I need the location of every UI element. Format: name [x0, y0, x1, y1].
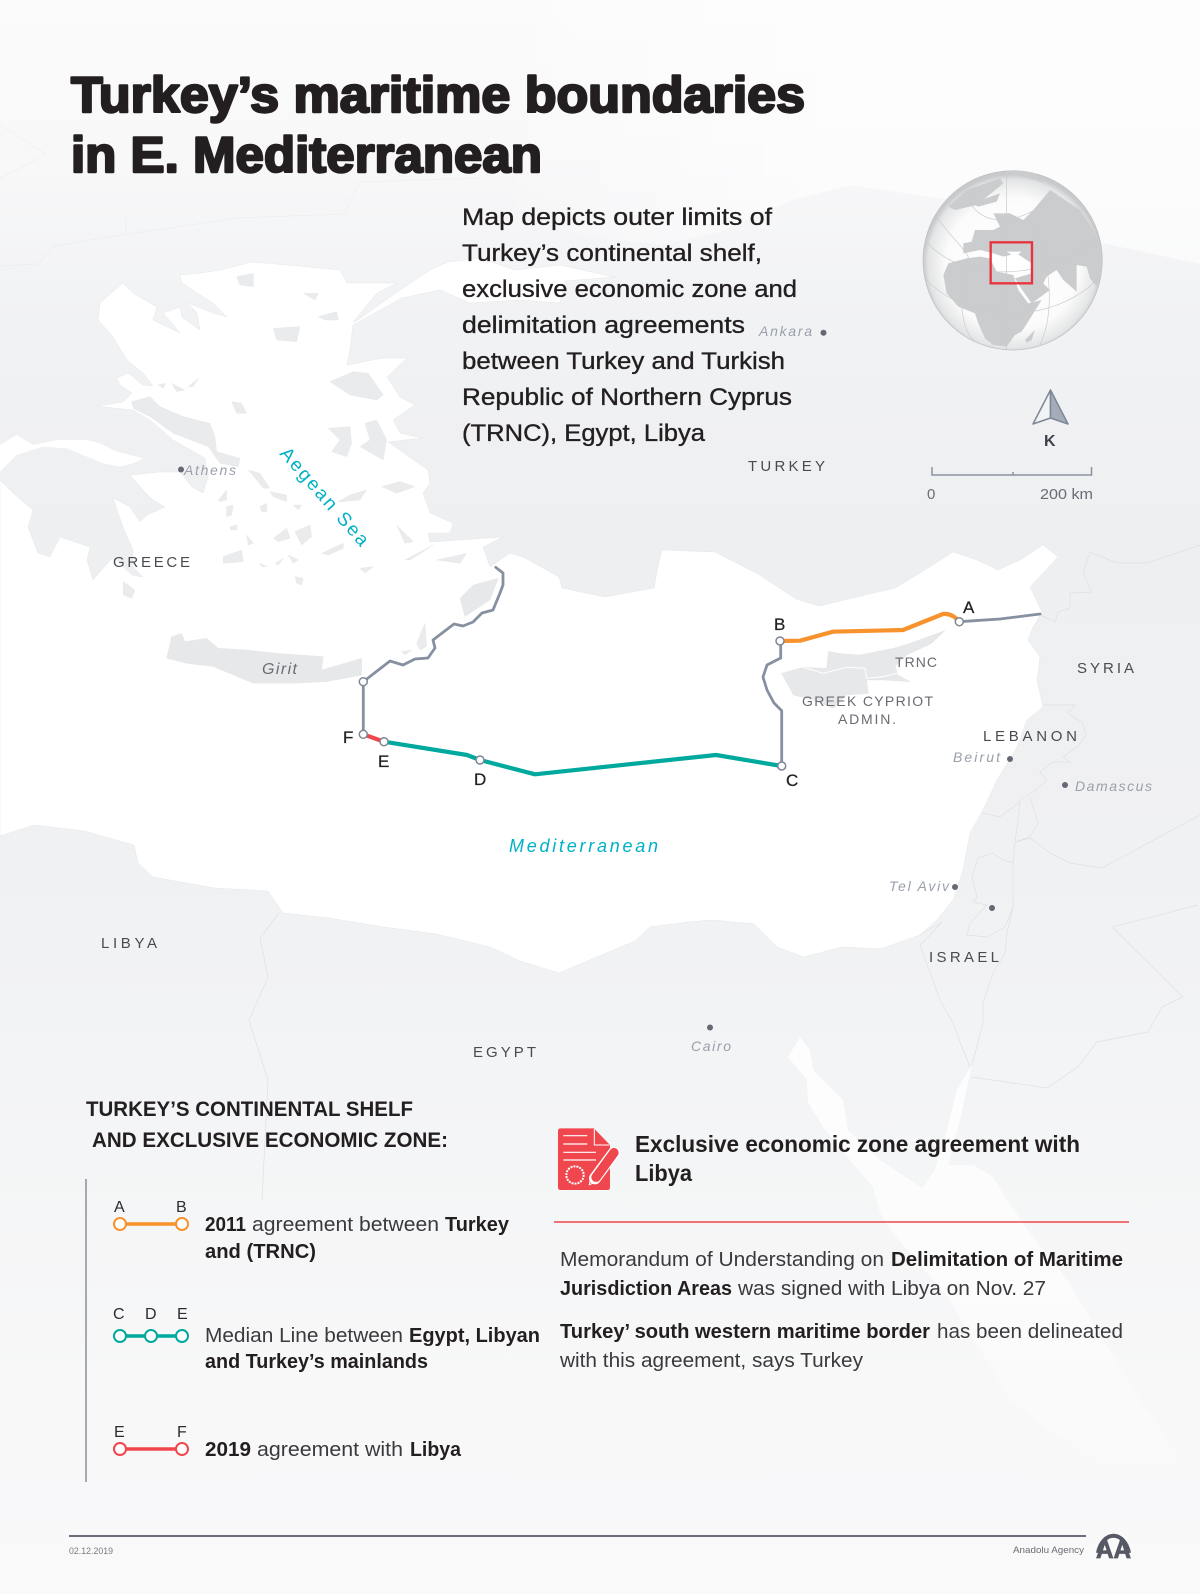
panel body text: has been delineated	[937, 1321, 1123, 1343]
route: Aegean grey limit	[363, 567, 503, 734]
panel body text: was signed with Libya on Nov. 27	[737, 1278, 1046, 1300]
legend item: C-D-E median line: C	[113, 1306, 125, 1323]
panel heading: Libya	[635, 1160, 692, 1186]
legend item: E-F 2019: E	[114, 1424, 125, 1441]
country label: Egypt: EGYPT	[473, 1044, 536, 1061]
legend item: E-F 2019: 2019	[205, 1439, 251, 1461]
icon: signed document	[558, 1128, 614, 1190]
sea label: Aegean Sea: Aegean Sea	[275, 443, 373, 551]
route: C to B grey limit	[763, 641, 782, 766]
legend item: E-F 2019: agreement with	[257, 1439, 403, 1461]
country label: Syria: SYRIA	[1077, 660, 1134, 677]
island label: Girit: Girit	[262, 661, 298, 678]
logo: Anadolu Agency: AA	[1096, 1536, 1131, 1564]
country label: Greece: GREECE	[113, 554, 190, 571]
route point letters: A	[963, 598, 975, 617]
label: TRNC: TRNC	[895, 654, 937, 670]
route point letters: E	[378, 752, 389, 771]
panel: Libya agreement	[554, 1131, 1129, 1372]
legend item: E-F 2019	[114, 1424, 462, 1461]
panel heading: Exclusive economic zone agreement with	[635, 1131, 1080, 1157]
legend panel	[86, 1179, 540, 1482]
panel body text: Delimitation of Maritime	[891, 1249, 1123, 1271]
legend heading: AND EXCLUSIVE ECONOMIC ZONE:	[92, 1129, 448, 1152]
description text block: exclusive economic zone and	[462, 276, 797, 303]
city: Beirut: Beirut	[953, 749, 1001, 765]
route: A-B orange	[780, 614, 959, 641]
description text block: Map depicts outer limits of	[462, 204, 772, 231]
north arrow: K	[1044, 433, 1056, 450]
route: A to Syria grey limit	[959, 614, 1040, 622]
map: black sea	[470, 0, 1200, 264]
route point letters: D	[474, 770, 486, 789]
panel body text: Turkey’ south western maritime border	[560, 1321, 930, 1343]
map: mediterranean and aegean sea	[0, 258, 1058, 973]
country label: Libya: LIBYA	[101, 935, 157, 952]
description text block: delimitation agreements	[462, 312, 745, 339]
legend item: C-D-E median line: D	[145, 1306, 157, 1323]
route point letters: B	[774, 615, 785, 634]
route: C-D-E teal	[384, 742, 782, 774]
legend item: A-B 2011	[114, 1199, 510, 1263]
label: Greek Cypriot Admin: GREEK CYPRIOT	[802, 693, 933, 709]
scale bar	[927, 467, 1093, 503]
map: land borders	[0, 125, 1200, 1200]
legend item: A-B 2011: A	[114, 1199, 125, 1216]
panel heading	[635, 1131, 1080, 1186]
city: Damascus: Damascus	[1075, 778, 1152, 794]
description text block	[462, 204, 797, 447]
scale bar: 0	[927, 486, 935, 503]
footer: 02.12.2019	[69, 1546, 113, 1556]
footer	[69, 1536, 1131, 1564]
legend item: A-B 2011: Turkey	[445, 1214, 510, 1236]
description text block: Republic of Northern Cyprus	[462, 384, 792, 411]
description text block: between Turkey and Turkish	[462, 348, 785, 375]
route point letters: C	[786, 771, 798, 790]
panel body text: Memorandum of Understanding on	[560, 1249, 884, 1271]
city: Cairo	[691, 1024, 731, 1054]
city: Jerusalem marker	[989, 905, 995, 911]
panel body text: with this agreement, says Turkey	[559, 1350, 863, 1372]
sea label: Mediterranean: Mediterranean	[509, 836, 658, 856]
title	[71, 67, 805, 183]
title: in E. Mediterranean	[71, 127, 542, 183]
route: E-F red	[363, 734, 384, 742]
country label: Lebanon: LEBANON	[983, 728, 1077, 745]
legend item: A-B 2011: B	[176, 1199, 187, 1216]
locator globe	[923, 171, 1102, 350]
legend heading: TURKEY’S CONTINENTAL SHELF	[86, 1098, 413, 1121]
north arrow	[1033, 390, 1068, 450]
route node markers	[359, 618, 963, 770]
panel body text: Jurisdiction Areas	[560, 1278, 732, 1300]
legend item: A-B 2011: agreement between	[252, 1214, 439, 1236]
label: Greek Cypriot Admin: ADMIN.	[838, 711, 896, 727]
legend item: C-D-E median line: Egypt, Libyan	[409, 1325, 540, 1347]
legend item: C-D-E median line: and Turkey’s mainlands	[205, 1351, 428, 1373]
legend item: A-B 2011: 2011	[205, 1214, 246, 1236]
city: Athens: Athens	[183, 462, 236, 478]
legend heading	[86, 1098, 448, 1152]
legend item: E-F 2019: Libya	[410, 1439, 462, 1461]
map: aegean islands and crete	[123, 273, 498, 683]
map: gulf of corinth	[0, 435, 143, 472]
country label: Israel: ISRAEL	[929, 949, 999, 966]
city: Ankara: Ankara	[758, 323, 812, 339]
route point letters	[343, 598, 975, 790]
route point letters: F	[343, 728, 353, 747]
legend item: E-F 2019: F	[177, 1424, 187, 1441]
map: gulfs of suez and aqaba, red sea	[788, 1037, 1190, 1470]
legend item: A-B 2011: and (TRNC)	[205, 1241, 316, 1263]
maritime boundary routes	[359, 567, 1040, 774]
description text block: Turkey’s continental shelf,	[462, 240, 762, 267]
legend item: C-D-E median line: E	[177, 1306, 188, 1323]
legend item: C-D-E median line: Median Line between	[205, 1325, 403, 1347]
map: cyprus	[782, 631, 945, 708]
city: Tel Aviv: Tel Aviv	[889, 878, 950, 894]
description text block: (TRNC), Egypt, Libya	[462, 420, 706, 447]
title: Turkey’s maritime boundaries	[71, 67, 805, 123]
map labels	[101, 323, 1152, 1061]
legend item: C-D-E median line	[113, 1306, 540, 1373]
country label: Turkey: TURKEY	[748, 458, 825, 475]
panel body text	[559, 1249, 1123, 1372]
city: Cairo: Cairo	[691, 1038, 731, 1054]
scale bar: 200 km	[1040, 486, 1093, 503]
label: Greek Cypriot Admin	[802, 693, 933, 727]
footer: Anadolu Agency	[1013, 1545, 1084, 1556]
